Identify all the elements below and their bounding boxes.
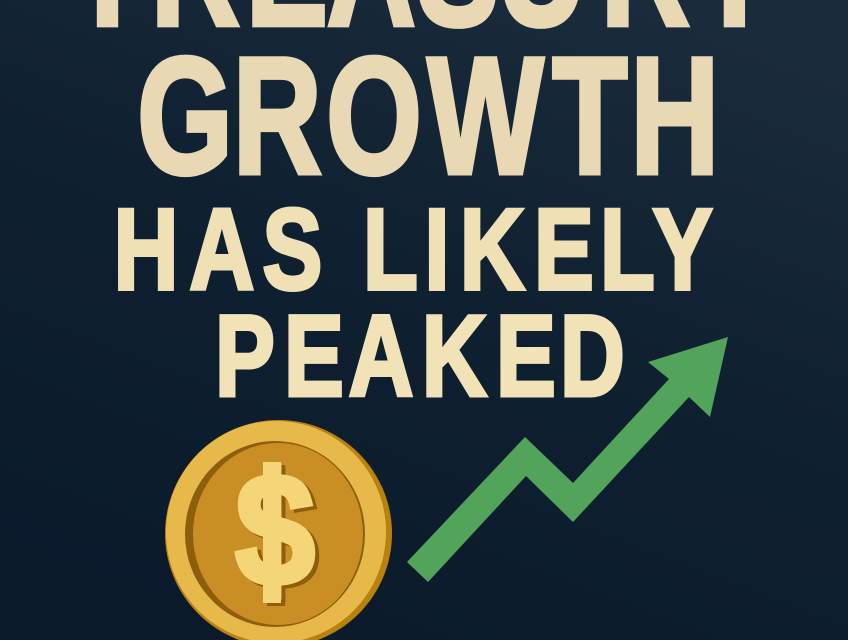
icon: gold dollar coin	[165, 420, 392, 640]
title line: peaked: PEAKED	[215, 292, 625, 420]
title line: has likely: HAS LIKELY	[114, 185, 712, 314]
arrow: rising green zigzag	[407, 337, 728, 582]
title	[70, 0, 775, 420]
dollar sign: $	[235, 441, 315, 620]
title line: growth: GROWTH	[137, 23, 719, 208]
dollar sign shadow: $	[239, 444, 319, 623]
